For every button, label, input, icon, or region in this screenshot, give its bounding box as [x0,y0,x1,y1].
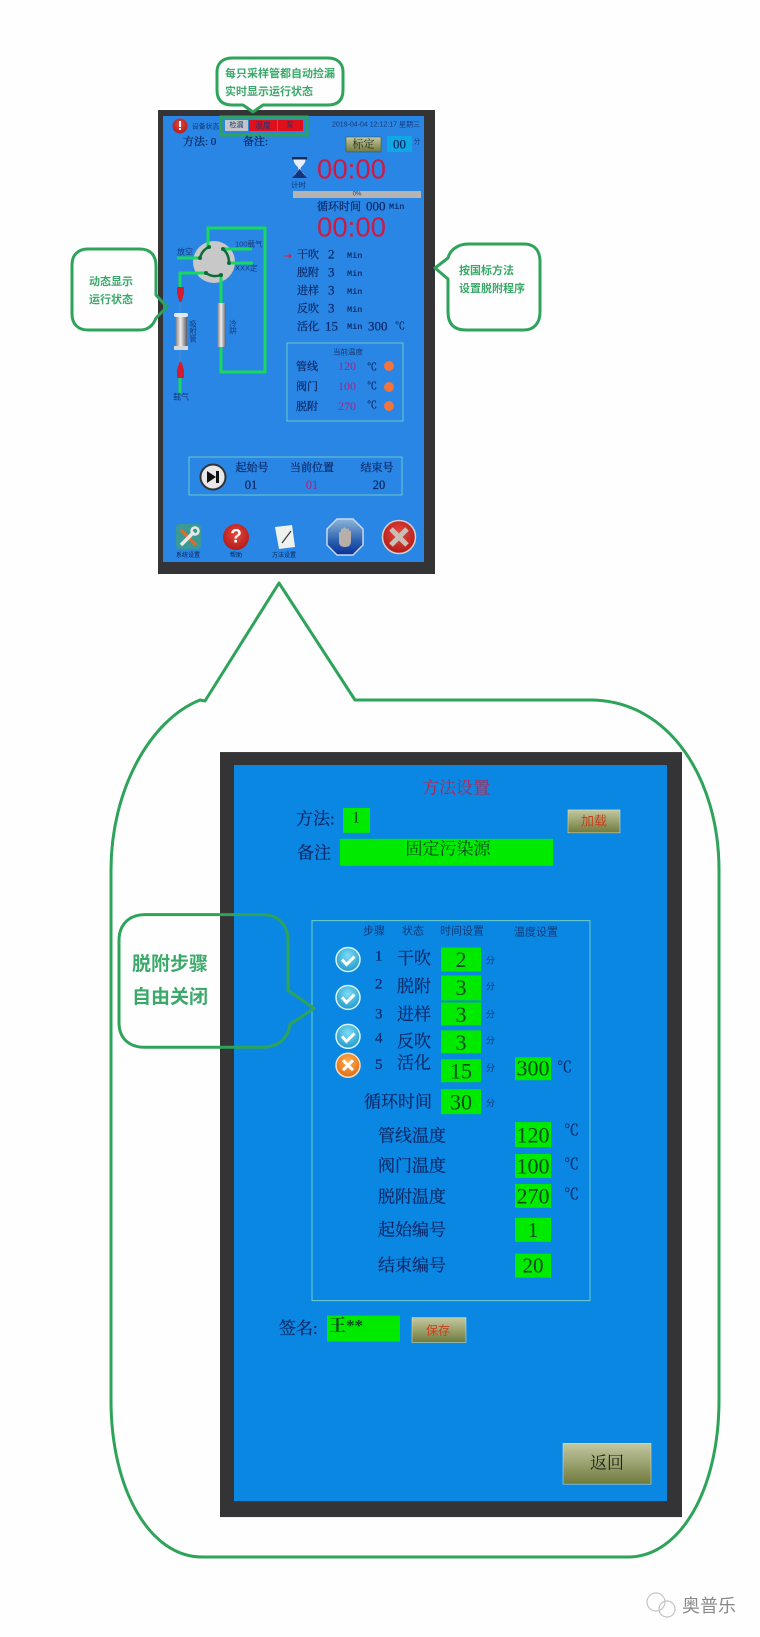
panel: current temperature: 脱附 [296,399,318,413]
status indicators [221,117,307,135]
temperature and numbering settings: 结束编号 [378,1256,446,1275]
panel: current temperature [287,343,403,421]
cycle time setting [364,1089,495,1115]
step rows: 3 [375,1006,382,1022]
callout: desorption steps can be closed: 自由关闭 [132,986,208,1008]
panel: sample positions: 当前位置 [290,460,334,474]
step list: Min [347,269,362,279]
time settings: 分 [486,981,495,991]
step list: 3 [328,300,334,316]
note: 固定污染源 [406,839,492,858]
load button [568,810,620,833]
callout: dynamic status: 运行状态 [89,292,133,306]
callout: national standard method [435,244,540,330]
time settings: 3 [456,1002,467,1027]
save button [412,1318,466,1343]
flow diagram: 吸附管 [188,319,198,343]
panel: sample positions: 20 [373,478,385,492]
cycle time setting: 30 [450,1090,472,1115]
status indicators: 检漏 [230,120,244,129]
step rows: 进样 [397,1005,431,1024]
device frame [220,752,682,1517]
callout: desorption steps can be closed: 脱附步骤 [132,953,208,975]
callout: leak detection: 实时显示运行状态 [225,84,313,98]
panel: step settings [312,921,590,1301]
table headers [363,924,558,939]
step list: 2 [328,246,334,262]
step list: ℃ [395,320,405,332]
time settings: 分 [486,956,495,966]
temperature and numbering settings: 270 [517,1183,550,1208]
icon: wechat [647,1593,675,1617]
callout: dynamic status: 动态显示 [89,274,133,288]
step list: 反吹 [297,301,319,315]
panel: sample positions: 结束号 [360,460,394,474]
icon: stop [327,519,363,555]
temperature and numbering settings: 起始编号 [378,1220,446,1239]
panel: sample positions [189,457,402,495]
step list: 脱附 [297,265,319,279]
method number: 方法: [296,809,335,828]
icon: help: ? [230,526,242,548]
method and note: 备注: [243,135,268,148]
table headers: 时间设置 [440,925,484,938]
step list: 进样 [297,283,319,297]
temperature and numbering settings: 120 [517,1123,550,1148]
screen title: 方法设置 [422,778,490,797]
note [297,839,553,866]
icon: system settings [176,524,201,559]
panel: current temperature: 100 [338,379,356,393]
temperature and numbering settings: ℃ [564,1157,579,1173]
temperature and numbering settings: 20 [523,1254,543,1278]
time settings: 分 [486,1063,495,1073]
calibrate button: 标定 [352,136,374,150]
cycle time: Min [389,202,404,212]
time settings: 15 [450,1059,472,1084]
step rows: 2 [375,976,382,992]
step rows: 活化 [397,1054,431,1073]
calibrate minutes [387,136,421,152]
watermark [647,1593,736,1617]
icon: hourglass [291,157,307,190]
flow diagram: XXX定 [235,262,258,272]
time settings: 3 [456,1030,467,1055]
table headers: 温度设置 [514,925,558,939]
table headers: 步骤 [363,925,385,938]
icon: system settings: 系统设置 [176,551,200,559]
cycle time: 循环时间 [317,199,361,213]
step list: 300 [368,318,388,334]
panel: method settings screen [220,752,682,1517]
panel: sample positions: 起始号 [236,460,268,474]
method number: 1 [352,809,360,826]
back button [563,1443,651,1484]
status indicators: 泵 [286,121,294,129]
time settings: 分 [486,1035,495,1045]
status indicators: 温度 [255,120,271,130]
signature: 签名: [279,1319,318,1338]
temperature and numbering settings: ℃ [564,1187,579,1203]
total timer: 00:00 [317,212,386,242]
panel: sample positions: 01 [306,478,318,492]
step list: 15 [325,318,338,334]
large callout outline [111,583,719,1557]
calibrate button [346,136,381,152]
time settings [441,947,495,1084]
panel: sample positions: 01 [245,478,257,492]
flow diagram [173,228,265,402]
icon: alert [172,118,188,134]
temperature and numbering settings: ℃ [564,1123,579,1139]
method and note: 方法: 0 [183,134,217,148]
date and time: 2019-04-04 12:12:17 星期三 [332,120,420,128]
save button: 保存 [426,1324,450,1338]
back button: 返回 [590,1454,624,1473]
calibrate minutes: 分 [414,136,421,146]
temperature and numbering settings: 阀门温度 [378,1156,446,1175]
panel: current temperature: ℃ [367,362,377,374]
cycle time [317,198,404,214]
callout: leak detection: 每只采样管都自动捡漏 [225,66,335,80]
step list [284,246,405,334]
panel: current temperature: 阀门 [296,379,318,393]
device frame [158,110,435,574]
step rows [375,949,431,1073]
method number [296,808,370,833]
icon: hourglass: 计时 [291,180,306,190]
step list: 3 [328,282,334,298]
temperature and numbering settings: 脱附温度 [378,1187,446,1206]
icon: method settings: 方法设置 [272,551,296,559]
step rows: 脱附 [397,977,431,996]
progress bar [293,191,421,198]
temperature and numbering settings: 100 [517,1153,550,1178]
arrow: current step [284,254,291,258]
icon: help: 帮助 [230,551,242,559]
temperature and numbering settings: 管线温度 [378,1127,446,1146]
cycle time setting: 分 [486,1098,495,1108]
flow diagram: 载气 [173,392,189,402]
callout: leak detection [217,58,343,112]
calibrate minutes: 00 [393,136,406,152]
panel: current temperature: 管线 [296,359,318,373]
callout: national standard method: 按国标方法 [459,263,514,277]
method and note [183,134,268,148]
step rows: 1 [375,949,382,965]
load button: 加载 [581,813,607,828]
icon: close [382,520,416,554]
device status label: 设备状态 [192,122,219,130]
step list: Min [347,305,362,315]
table headers: 状态 [402,924,424,938]
panel: current temperature: 当前温度 [333,346,363,356]
icon: method settings [272,525,296,559]
signature: 王** [329,1316,363,1335]
step list: 3 [328,264,334,280]
step rows: 反吹 [397,1032,431,1051]
callout: dynamic status [72,249,167,330]
panel: current temperature: 120 [338,359,356,373]
temperature and numbering settings [378,1122,579,1278]
activation temperature: 300 [517,1056,550,1081]
step rows: 干吹 [397,949,431,968]
time settings: 2 [456,947,466,972]
progress bar: 0% [353,192,362,198]
countdown: 00:00 [317,154,386,184]
panel: current temperature: 270 [338,399,356,413]
activation temperature: ℃ [557,1060,572,1076]
activation temperature [515,1056,572,1081]
step rows: 5 [375,1057,382,1073]
watermark: 奥普乐 [682,1596,736,1616]
panel: current temperature: ℃ [367,400,377,412]
icons: step status [336,948,360,1077]
time settings: 分 [486,1009,495,1019]
step list: Min [347,251,362,261]
step list: 干吹 [297,247,319,261]
flow diagram: 放空 [177,246,193,256]
screen [234,765,667,1501]
cycle time setting: 循环时间 [364,1093,432,1112]
step list: Min [347,322,362,332]
panel: main run screen [158,110,435,574]
note: 备注 [297,843,331,862]
screen [163,116,424,562]
signature [279,1316,400,1342]
icon: help [223,524,249,559]
step list: 活化 [297,319,319,333]
time settings: 3 [456,975,467,1000]
step list: Min [347,287,362,297]
flow diagram: 100载气 [235,238,263,248]
temperature and numbering settings: 1 [528,1218,538,1242]
callout: national standard method: 设置脱附程序 [459,281,525,295]
flow diagram: 冷阱 [228,318,238,336]
panel: current temperature: ℃ [367,380,377,392]
step rows: 4 [375,1030,383,1046]
callout: desorption steps can be closed [119,915,314,1047]
cycle time: 000 [366,198,386,214]
